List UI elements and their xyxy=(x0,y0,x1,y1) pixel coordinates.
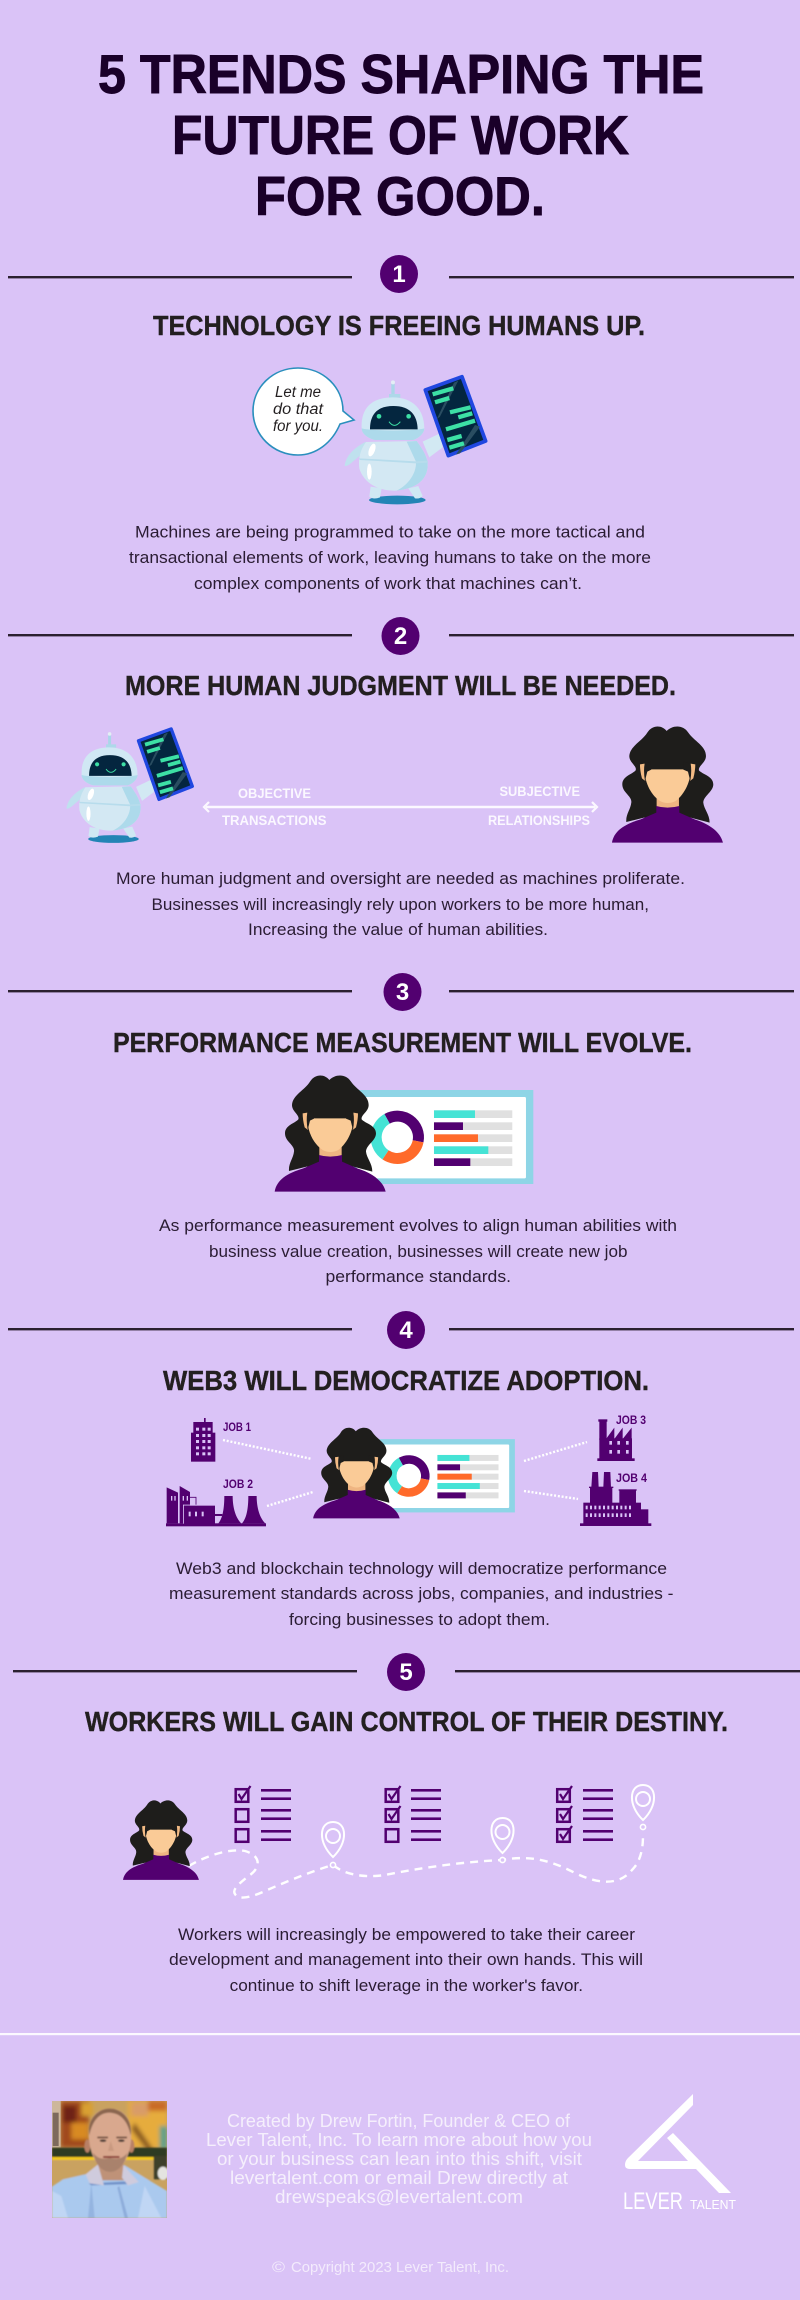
double arrow spectrum xyxy=(204,784,597,828)
icon: plant, job 4: JOB 4 xyxy=(616,1473,648,1485)
text block 5: continue to shift leverage in the worker's favor. xyxy=(230,1976,583,1995)
panel: trend 3 xyxy=(8,973,794,1286)
icon: robot with tablet xyxy=(66,729,192,843)
icon: woman xyxy=(123,1800,199,1880)
text block 4: forcing businesses to adopt them. xyxy=(289,1610,550,1629)
text block 5: development and management into their own hands. This will xyxy=(169,1950,643,1969)
icon: power plant, job 2 xyxy=(166,1479,266,1526)
title: FOR GOOD. xyxy=(255,165,545,227)
number badge 5: 5 xyxy=(399,1659,413,1686)
author photo xyxy=(52,2101,168,2218)
icon: map pin 2 xyxy=(491,1818,514,1863)
checklist 1 xyxy=(236,1786,291,1842)
copyright line: Copyright 2023 Lever Talent, Inc. xyxy=(291,2260,509,2276)
panel: trend 2 xyxy=(8,617,794,939)
heading 1: TECHNOLOGY IS FREEING HUMANS UP. xyxy=(153,310,645,341)
text block 2: Businesses will increasingly rely upon workers to be more human, xyxy=(152,895,649,914)
text block 4: Web3 and blockchain technology will democratize performance xyxy=(176,1559,667,1578)
icon: woman xyxy=(612,726,723,843)
speech bubble: Let me xyxy=(275,384,321,401)
text block 2: Increasing the value of human abilities. xyxy=(248,920,548,939)
text block 1: complex components of work that machines can’t. xyxy=(194,574,582,593)
double arrow spectrum: SUBJECTIVE xyxy=(500,784,580,799)
icon: robot with tablet xyxy=(345,377,486,504)
text block 5 xyxy=(169,1925,643,1995)
panel: trend 1 xyxy=(8,255,794,593)
text block 3 xyxy=(159,1216,677,1286)
text block 4 xyxy=(169,1559,674,1629)
illustration: woman with performance dashboard xyxy=(275,1075,533,1192)
panel: footer xyxy=(52,2094,736,2276)
copyright line: © xyxy=(272,2259,285,2276)
double arrow spectrum: RELATIONSHIPS xyxy=(488,813,590,828)
panel: trend 5 xyxy=(13,1653,800,1995)
speech bubble xyxy=(253,368,354,455)
text block 2: More human judgment and oversight are needed as machines proliferate. xyxy=(116,869,685,888)
logo: Lever Talent xyxy=(623,2094,736,2215)
number badge 1 xyxy=(380,255,418,293)
text block 2 xyxy=(116,869,685,939)
text block 5: Workers will increasingly be empowered to take their career xyxy=(178,1925,635,1944)
number badge 4: 4 xyxy=(399,1317,413,1344)
heading 4: WEB3 WILL DEMOCRATIZE ADOPTION. xyxy=(163,1365,649,1396)
text block 3: business value creation, businesses will create new job xyxy=(209,1242,628,1261)
number badge 1: 1 xyxy=(392,261,406,288)
author credit text: drewspeaks@levertalent.com xyxy=(275,2186,523,2207)
icon: office building, job 1 xyxy=(191,1418,251,1462)
icon: map pin 3 xyxy=(632,1785,654,1830)
author credit text: levertalent.com or email Drew directly at xyxy=(230,2167,568,2188)
heading 3: PERFORMANCE MEASUREMENT WILL EVOLVE. xyxy=(113,1027,692,1058)
text block 1 xyxy=(129,522,651,593)
speech bubble: do that xyxy=(273,401,324,418)
author credit text: Lever Talent, Inc. To learn more about how you xyxy=(206,2129,592,2150)
author credit text: or your business can lean into this shift, visit xyxy=(217,2148,582,2169)
text block 1: Machines are being programmed to take on the more tactical and xyxy=(135,522,645,542)
logo: Lever Talent: TALENT xyxy=(690,2197,736,2212)
text block 4: measurement standards across jobs, companies, and industries - xyxy=(169,1584,674,1603)
dashed career path xyxy=(189,1835,643,1898)
text block 3: As performance measurement evolves to align human abilities with xyxy=(159,1216,677,1235)
title xyxy=(98,43,704,227)
title: FUTURE OF WORK xyxy=(172,104,629,166)
illustration: woman with dashboard xyxy=(313,1428,515,1518)
text block 3: performance standards. xyxy=(326,1267,511,1286)
number badge 3: 3 xyxy=(396,979,409,1006)
dotted connectors xyxy=(223,1440,587,1506)
icon: power plant, job 2: JOB 2 xyxy=(223,1479,253,1491)
icon: factory, job 3: JOB 3 xyxy=(616,1415,646,1427)
logo: Lever Talent: LEVER xyxy=(623,2188,683,2215)
number badge 5 xyxy=(387,1653,425,1691)
checklist 3 xyxy=(557,1786,613,1842)
double arrow spectrum: OBJECTIVE xyxy=(238,786,311,801)
icon: office building, job 1: JOB 1 xyxy=(223,1422,251,1434)
number badge 3 xyxy=(384,973,422,1011)
double arrow spectrum: TRANSACTIONS xyxy=(222,813,326,828)
number badge 2: 2 xyxy=(394,623,407,650)
speech bubble: for you. xyxy=(273,418,323,435)
heading 2: MORE HUMAN JUDGMENT WILL BE NEEDED. xyxy=(125,670,676,701)
heading 5: WORKERS WILL GAIN CONTROL OF THEIR DESTINY. xyxy=(85,1706,728,1737)
icon: factory, job 3 xyxy=(597,1415,646,1461)
title: 5 TRENDS SHAPING THE xyxy=(98,43,704,105)
icon: plant, job 4 xyxy=(580,1472,651,1526)
author credit text: Created by Drew Fortin, Founder & CEO of xyxy=(227,2110,571,2131)
panel: trend 4 xyxy=(8,1311,794,1629)
author credit text xyxy=(206,2110,592,2207)
text block 1: transactional elements of work, leaving humans to take on the more xyxy=(129,548,651,567)
number badge 2 xyxy=(382,617,420,655)
icon: map pin 1 xyxy=(322,1822,344,1868)
number badge 4 xyxy=(387,1311,425,1349)
checklist 2 xyxy=(386,1786,441,1842)
